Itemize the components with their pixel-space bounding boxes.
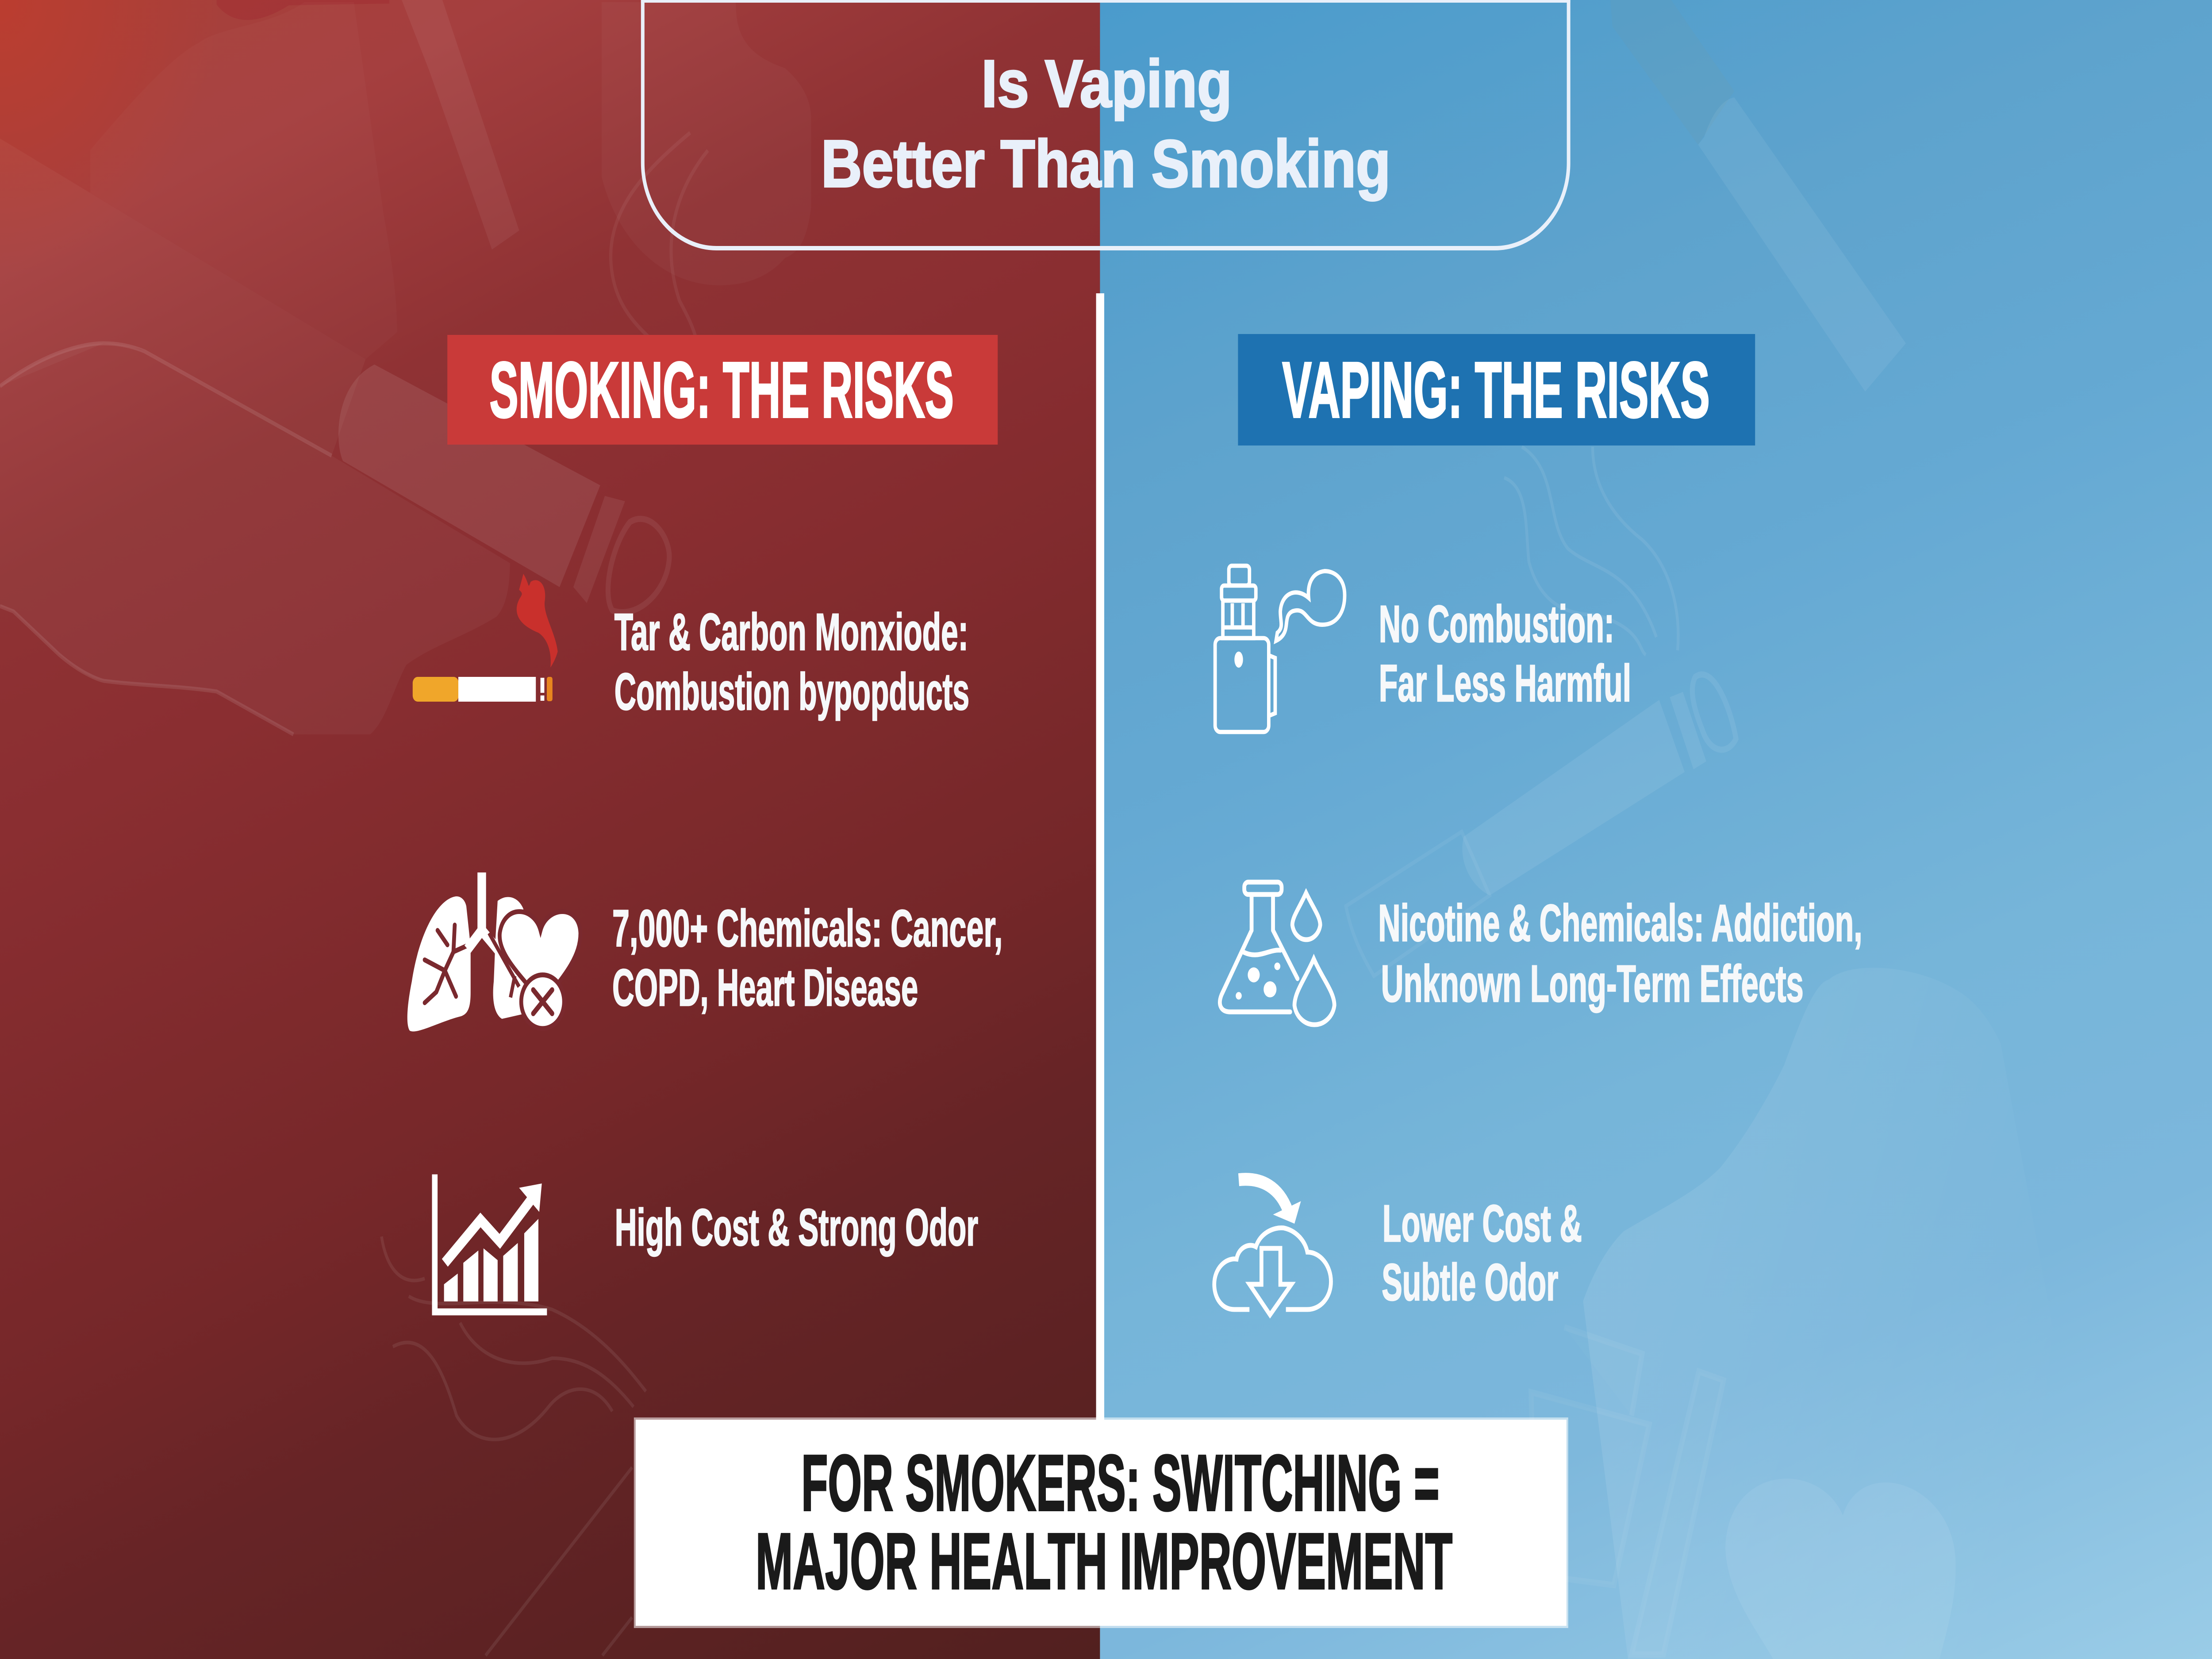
text: 7,000+ chemicals [612, 899, 1002, 1017]
icon: chemical flask with drops [1220, 882, 1334, 1025]
text: high cost and strong odor: High Cost & Strong Odor [615, 1198, 978, 1256]
icon: lungs and heart with cross [407, 872, 580, 1032]
title: Is Vaping [981, 46, 1232, 121]
icon: vape device with vapor [1215, 566, 1345, 732]
text: tar and carbon monoxide: Combustion bypopducts [614, 662, 969, 721]
icon: rising cost chart [432, 1175, 547, 1315]
text: no combustion: No Combustion: [1379, 595, 1614, 653]
text: 7,000+ chemicals: 7,000+ Chemicals: Cancer, [612, 899, 1002, 957]
text: nicotine and chemicals: Unknown Long-Term Effects [1381, 954, 1804, 1013]
text: nicotine and chemicals [1378, 894, 1863, 1013]
heading: smoking the risks: SMOKING: THE RISKS [489, 346, 954, 434]
text: lower cost and subtle odor [1382, 1194, 1582, 1311]
panel: smoking side [0, 0, 1100, 1659]
title: Better Than Smoking [821, 126, 1390, 201]
heading: vaping the risks [1238, 334, 1755, 445]
panel: vaping side [1100, 0, 2212, 1659]
icon: burning cigarette [413, 574, 558, 702]
text: lower cost and subtle odor: Lower Cost & [1382, 1194, 1582, 1252]
callout: conclusion box: MAJOR HEALTH IMPROVEMENT [756, 1517, 1452, 1606]
heading: smoking the risks [447, 335, 998, 445]
callout: conclusion box [636, 1420, 1567, 1626]
text: 7,000+ chemicals: COPD, Heart Disease [612, 958, 918, 1017]
heading: vaping the risks: VAPING: THE RISKS [1282, 346, 1710, 434]
text: no combustion: Far Less Harmful [1379, 654, 1631, 712]
title frame [641, 0, 1571, 248]
title [821, 46, 1390, 201]
text: tar and carbon monoxide [614, 603, 969, 721]
text: nicotine and chemicals: Nicotine & Chemicals: Addiction, [1378, 894, 1863, 952]
text: tar and carbon monoxide: Tar & Carbon Monxiode: [614, 603, 968, 661]
callout: conclusion box: FOR SMOKERS: SWITCHING = [801, 1438, 1440, 1528]
text: lower cost and subtle odor: Subtle Odor [1382, 1253, 1558, 1311]
icon: cloud with down arrow [1214, 1179, 1331, 1315]
text: no combustion [1379, 595, 1631, 712]
